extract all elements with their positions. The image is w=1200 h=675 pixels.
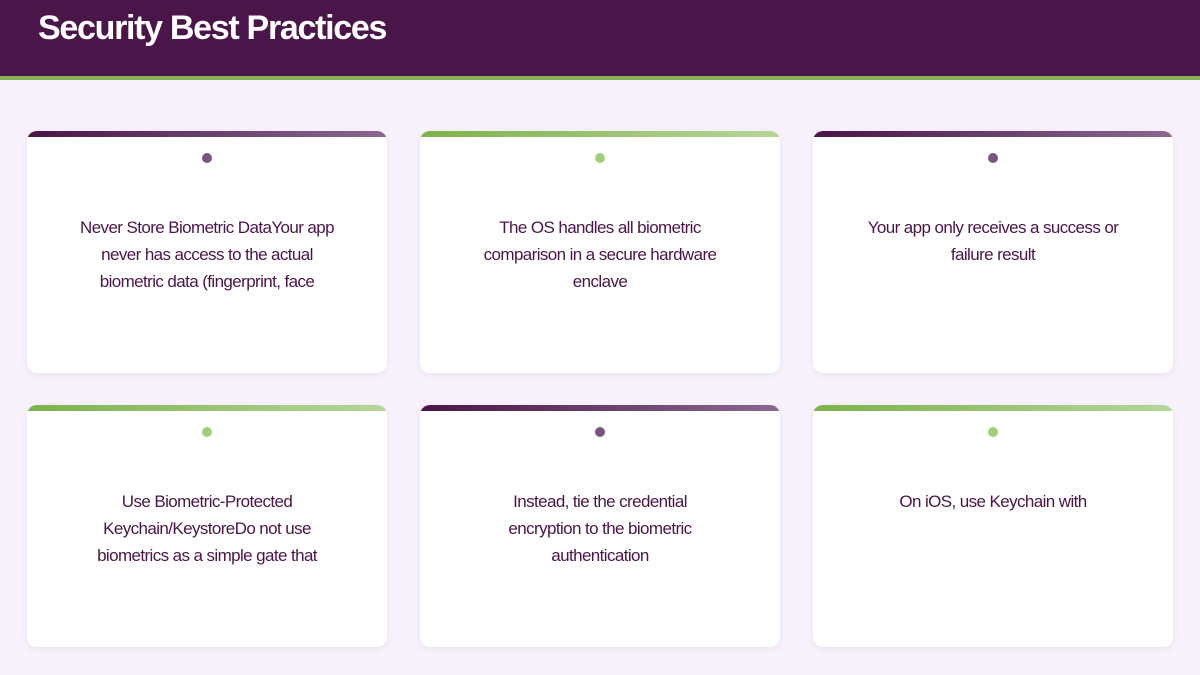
card 3 text: failure result: [951, 245, 1035, 264]
card 5 text: encryption to the biometric: [508, 519, 692, 538]
card 2 text: The OS handles all biometric: [499, 218, 701, 237]
title: Security Best Practices: [38, 9, 386, 47]
card 1 text: never has access to the actual: [101, 245, 313, 264]
card 2 text: [484, 218, 716, 291]
card 3 text: [868, 218, 1119, 264]
card 5 text: Instead, tie the credential: [513, 492, 687, 511]
card 4 text: [97, 492, 318, 565]
card 1 text: biometric data (fingerprint, face: [100, 272, 314, 291]
card 1 text: Never Store Biometric DataYour app: [80, 218, 334, 237]
card 6 text: On iOS, use Keychain with: [899, 492, 1087, 511]
card 4 text: Keychain/KeystoreDo not use: [103, 519, 311, 538]
card 5: [420, 405, 780, 647]
card 3 text: Your app only receives a success or: [868, 218, 1118, 237]
card 5 text: authentication: [551, 546, 649, 565]
card 4: [27, 405, 387, 647]
card 6: [813, 405, 1173, 647]
card 2: [420, 131, 780, 373]
card 4 text: biometrics as a simple gate that: [97, 546, 317, 565]
card 1: [27, 131, 387, 373]
card 3: [813, 131, 1173, 373]
card 2 text: comparison in a secure hardware: [484, 245, 716, 264]
card 1 text: [80, 218, 334, 291]
card 2 text: enclave: [573, 272, 627, 291]
card 5 text: [508, 492, 692, 565]
card 4 text: Use Biometric-Protected: [122, 492, 292, 511]
header: [0, 0, 1200, 80]
